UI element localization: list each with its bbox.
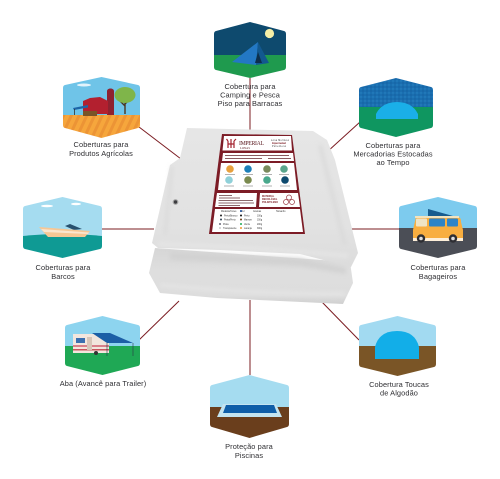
- label color table: Laranja: [244, 227, 252, 230]
- label color table: 150g: [257, 220, 263, 222]
- item: roof luggage: [399, 197, 477, 281]
- icon: trailer with awning: [65, 316, 140, 376]
- label: agricultural products: Produtos Agrícolas: [69, 149, 133, 158]
- label: roof luggage: Coberturas para: [411, 263, 466, 272]
- label header: Polietileno: [272, 145, 287, 148]
- label color table: Prata/Preto: [224, 218, 236, 222]
- icon: blue dome on soil: [359, 316, 436, 377]
- label material box: [259, 193, 300, 207]
- icon: covered pool: [210, 375, 289, 439]
- item: pools: [210, 375, 289, 460]
- label icon panel: [218, 163, 297, 190]
- label color table: Azul: [240, 210, 245, 213]
- label header: IMPERIAL: [239, 141, 264, 147]
- label color table: Marrom: [244, 218, 252, 222]
- label material box: MATERIAL: [262, 195, 275, 198]
- label: cotton covers: Cobertura Toucas: [369, 380, 429, 389]
- tarp upper fold: [152, 128, 358, 267]
- label color table: Verde: [244, 223, 251, 226]
- label header: [222, 136, 292, 150]
- item: cotton covers: [359, 316, 436, 398]
- label color table: Preto/Branco: [224, 214, 238, 218]
- icon: tent at night: [214, 22, 286, 79]
- label: agricultural products: Coberturas para: [74, 140, 129, 149]
- label: pools: Piscinas: [235, 451, 263, 460]
- label color table: [212, 209, 303, 232]
- label: trailer awning: Aba (Avancê para Trailer): [60, 379, 146, 388]
- label color table: Prata: [223, 223, 229, 226]
- icon: covered goods dome: [359, 78, 433, 138]
- item: boats: [23, 197, 102, 281]
- fold shading: [158, 145, 348, 294]
- label color table: 300g: [257, 228, 263, 230]
- label: camping: Camping e Pesca: [220, 90, 281, 100]
- label color table: Preto: [244, 214, 250, 218]
- label: camping: Piso para Barracas: [218, 99, 283, 108]
- label color table: 100g: [257, 216, 263, 218]
- label material box: POLIETILENO: [262, 201, 278, 204]
- product label: [209, 134, 305, 234]
- label header: LONAS: [240, 146, 250, 150]
- label: pools: Proteção para: [225, 442, 274, 451]
- label header: Impermeável: [272, 142, 286, 145]
- label color table: Transparente: [223, 227, 237, 230]
- icon: farm barn: [63, 77, 140, 139]
- icon: boat at sea: [23, 197, 102, 259]
- grommet: [173, 199, 178, 205]
- label description strip: [222, 153, 294, 161]
- label: boats: Barcos: [51, 272, 75, 281]
- label: cotton covers: de Algodão: [380, 388, 418, 398]
- label color table: Gramas: [253, 210, 262, 213]
- label: boats: Coberturas para: [36, 263, 91, 272]
- item: agricultural products: [63, 77, 140, 158]
- label color table: 200g: [257, 224, 263, 226]
- icon: camper van: [399, 197, 477, 259]
- label: stored goods: Mercadorias Estocadas: [353, 150, 433, 158]
- label: camping: Cobertura para: [224, 82, 276, 91]
- label: stored goods: ao Tempo: [376, 158, 410, 167]
- tarp lower fold: [149, 248, 353, 304]
- connector lines: [102, 78, 399, 375]
- label material box: RECICLÁVEL: [262, 198, 278, 201]
- label color table: Modelos/Cores: [221, 210, 237, 213]
- label composition box: [215, 193, 257, 207]
- central product: folded white tarp: [149, 128, 358, 304]
- label header: Lona Multiuso: [271, 139, 290, 142]
- item: stored goods: [353, 78, 433, 167]
- item: camping: [214, 22, 286, 108]
- label: stored goods: Coberturas para: [366, 141, 421, 150]
- label: roof luggage: Bagageiros: [419, 272, 457, 281]
- item: trailer awning: [60, 316, 146, 388]
- label color table: Tamanho: [276, 211, 286, 213]
